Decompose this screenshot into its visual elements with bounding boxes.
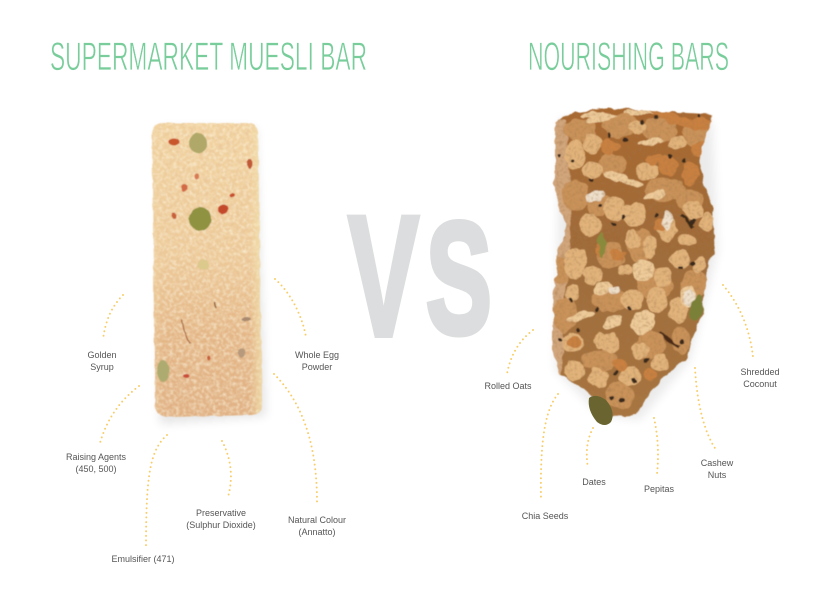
title: supermarket muesli bar: SUPERMARKET MUESLI BAR (50, 35, 367, 79)
photo: nourishing granola bar (550, 105, 720, 425)
callout: rolled oats (484, 330, 533, 391)
callout: shredded coconut (723, 285, 780, 389)
callout: chia seeds: Chia Seeds (522, 511, 569, 521)
callout: cashew nuts: Cashew (701, 458, 734, 468)
callout: raising agents: Raising Agents (66, 452, 127, 462)
VS lettering: V (348, 180, 419, 373)
callout: chia seeds (522, 394, 569, 521)
callout: natural colour: (Annatto) (298, 527, 336, 537)
callout: dates (582, 428, 606, 487)
callout: emulsifier: Emulsifier (471) (111, 554, 175, 564)
infographic canvas (51, 42, 779, 564)
callout: shredded coconut: Shredded (740, 367, 780, 377)
callout: shredded coconut: Coconut (743, 379, 777, 389)
callout: golden syrup: Golden (87, 350, 117, 360)
callout: pepitas: Pepitas (644, 484, 675, 494)
callout: rolled oats: Rolled Oats (484, 381, 532, 391)
callout: natural colour (274, 374, 346, 537)
callout: preservative: (Sulphur Dioxide) (186, 520, 256, 530)
callout: pepitas (644, 418, 675, 494)
VS lettering S: S (426, 190, 492, 368)
callout: golden syrup: Syrup (90, 362, 114, 372)
callout: preservative (186, 441, 256, 530)
photo: supermarket muesli bar (150, 120, 266, 424)
pale left edge (550, 120, 572, 375)
callout: whole egg powder (275, 279, 339, 372)
callout: cashew nuts: Nuts (708, 470, 727, 480)
callout: dates: Dates (582, 477, 606, 487)
callout: preservative: Preservative (196, 508, 246, 518)
callout: cashew nuts (695, 368, 734, 480)
callout: raising agents (66, 386, 139, 474)
callout: natural colour: Natural Colour (288, 515, 346, 525)
mid-tone oat fill (550, 113, 709, 409)
callout: raising agents: (450, 500) (75, 464, 117, 474)
callout: whole egg powder: Powder (302, 362, 332, 372)
callout: whole egg powder: Whole Egg (295, 350, 339, 360)
callout: emulsifier (111, 435, 175, 564)
callout: golden syrup (87, 295, 123, 372)
